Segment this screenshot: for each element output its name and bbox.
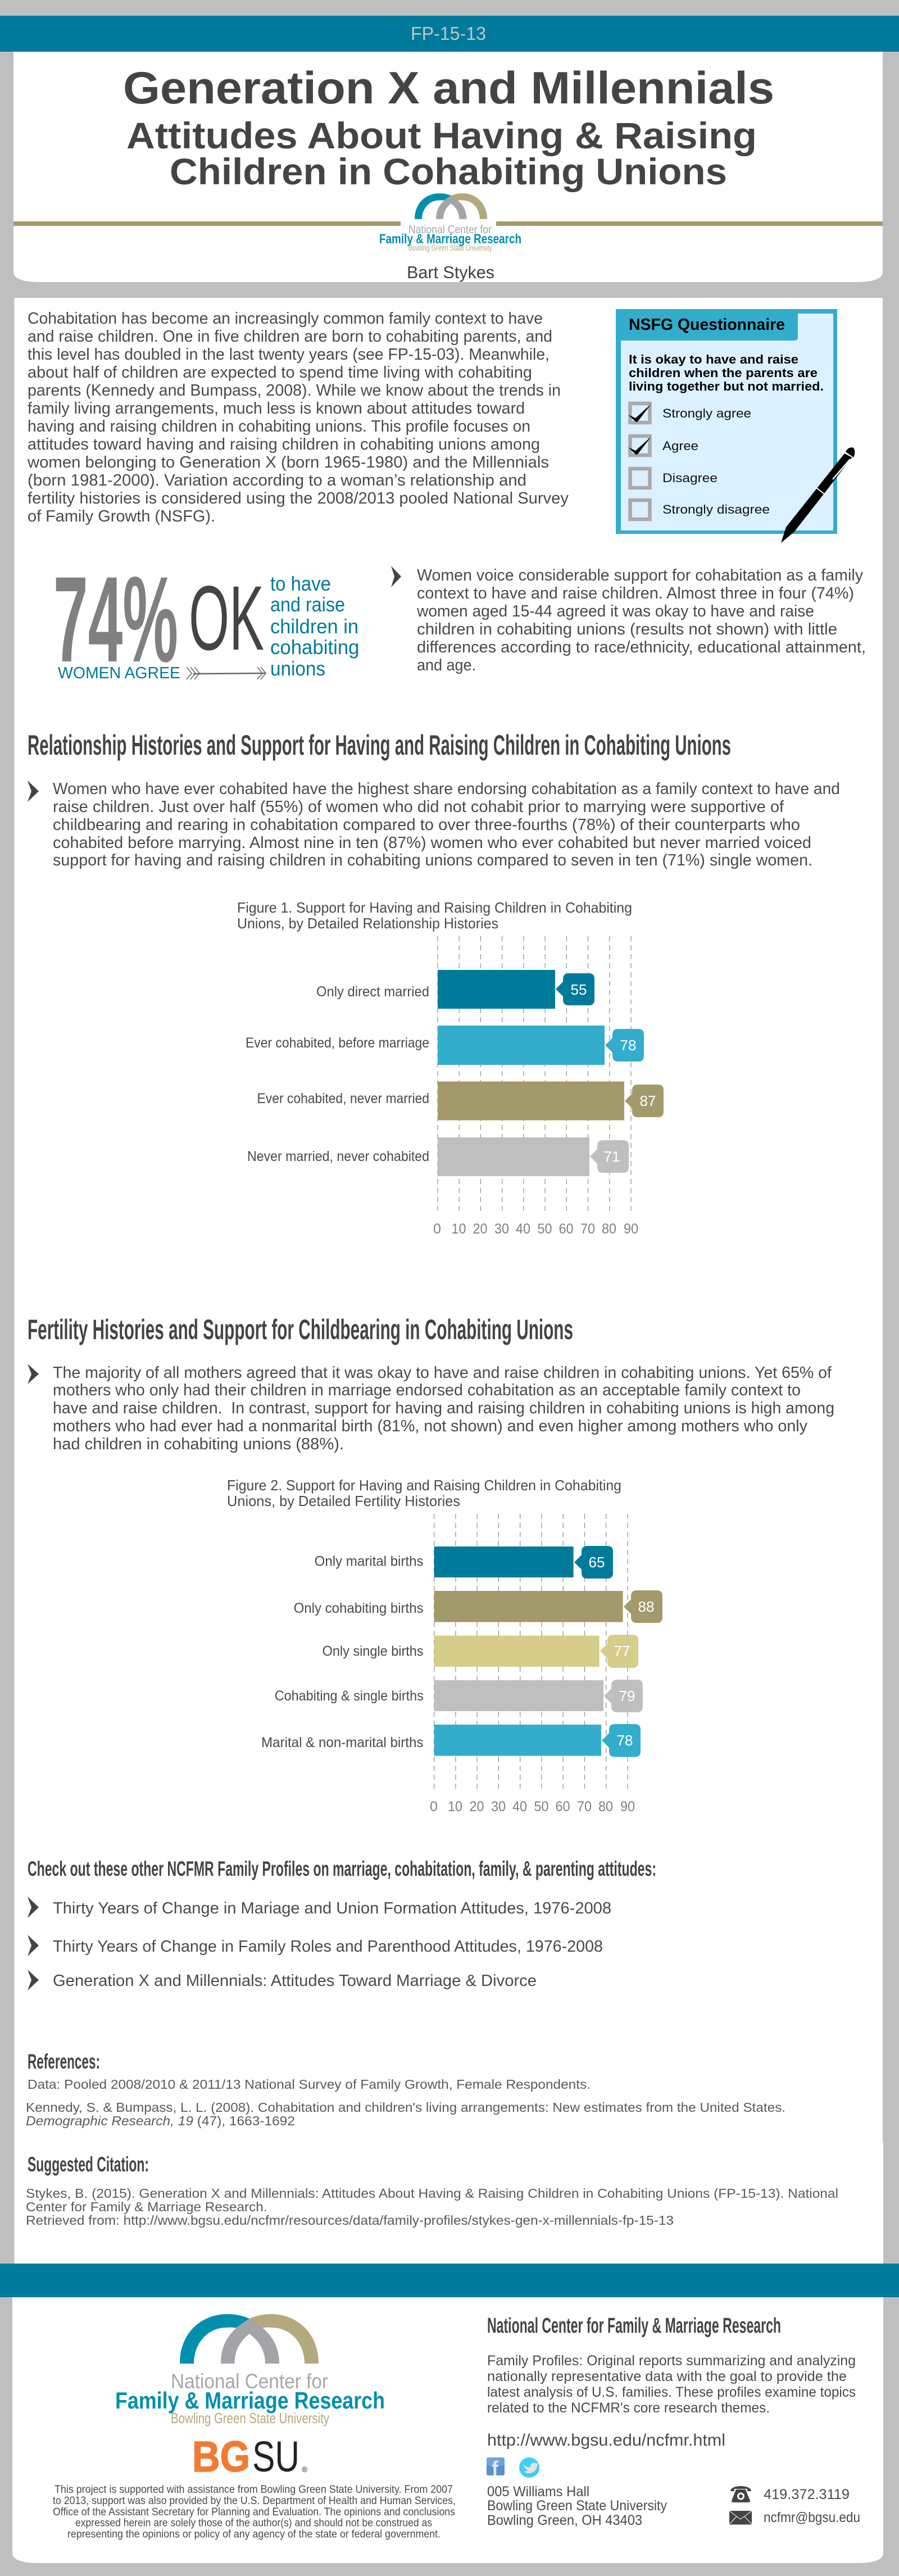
phone number: 419.372.3119	[764, 2487, 850, 2502]
paragraph: women voice support: women aged 15-44 agreed it was okay to have and raise	[416, 602, 814, 620]
figure 1 axis labels: 40	[516, 1221, 530, 1237]
title: Generation X and Millennials	[123, 63, 774, 114]
list: other family profiles: Thirty Years of Change in Mariage and Union Formation Attitudes, 1976-2008	[53, 1899, 611, 1917]
footer logo: BGSU	[192, 2433, 308, 2481]
bar: ever cohabited, never married 87	[257, 1081, 664, 1121]
bar: only marital births 65: 65	[589, 1554, 605, 1571]
bar: only direct married 55: Only direct married	[316, 984, 429, 1000]
funding statement: This project is supported with assistance from Bowling Green State University. From 2007	[55, 2484, 453, 2496]
intro paragraph: Cohabitation has become an increasingly common family context to have	[28, 310, 543, 328]
figure 1 axis labels: 70	[580, 1221, 595, 1237]
heading: suggested citation: Suggested Citation:	[28, 2153, 149, 2176]
bar: only single births 77: 77	[614, 1643, 630, 1659]
top band with profile number: FP-15-13	[411, 23, 486, 44]
figure 2 axis labels	[430, 1799, 635, 1815]
panel: NSFG questionnaire: NSFG Questionnaire	[629, 316, 785, 334]
paragraph: fertility histories: mothers who only had their children in marriage endorsed cohabitation as an acceptable family context to	[53, 1381, 801, 1399]
intro paragraph: (born 1981-2000). Variation according to a woman’s relationship and	[28, 471, 526, 489]
intro paragraph: and raise children. One in five children are born to cohabiting parents, and	[28, 328, 552, 346]
citation text: Center for Family & Marriage Research.	[26, 2199, 267, 2214]
bar: ever cohabited, never married 87: 87	[640, 1092, 656, 1109]
bar: only marital births 65	[315, 1546, 613, 1579]
bar: cohabiting and single births 79	[275, 1680, 643, 1712]
figure 2 title: Figure 2. Support for Having and Raising Children in Cohabiting	[227, 1477, 621, 1494]
list: other family profiles	[28, 1897, 611, 1990]
bar: only cohabiting births 88	[294, 1590, 662, 1623]
intro paragraph: parents (Kennedy and Bumpass, 2008). While we know about the trends in	[28, 382, 561, 400]
figure 1 title	[237, 899, 632, 932]
icon: pen	[781, 447, 855, 543]
figure 1 title: Figure 1. Support for Having and Raising Children in Cohabiting	[237, 899, 632, 916]
references text: Data: Pooled 2008/2010 & 2011/13 National Survey of Family Growth, Female Respondents.	[28, 2077, 591, 2092]
bar: only cohabiting births 88: 88	[638, 1598, 654, 1615]
title: Attitudes About Having & Raising	[126, 115, 757, 156]
figure 1 axis labels: 0	[433, 1221, 441, 1237]
bar: ever cohabited, before marriage 78: 78	[620, 1037, 636, 1054]
bar: marital and non-marital births 78: Marital & non-marital births	[261, 1735, 424, 1750]
bar: only direct married 55	[316, 970, 594, 1009]
paragraph: women voice support	[391, 566, 866, 674]
figure 2 axis labels: 20	[470, 1799, 484, 1815]
handwritten OK: OK	[189, 566, 264, 669]
icon: envelope	[729, 2511, 752, 2524]
figure 1 axis labels: 20	[473, 1221, 488, 1237]
figure 1 title: Unions, by Detailed Relationship Histories	[237, 915, 498, 932]
footer logo: BGSU: BG	[192, 2433, 250, 2481]
figure 1 axis labels	[433, 1221, 638, 1237]
paragraph: relationship histories: support for having and raising children in cohabiting unions compared to seven in ten (71%) single women.	[53, 851, 812, 869]
answer: disagree	[630, 469, 718, 488]
panel: NSFG questionnaire	[616, 309, 855, 543]
footer logo: BGSU: ®	[302, 2465, 308, 2474]
icon: facebook: f	[492, 2457, 499, 2480]
figure 2 axis labels: 30	[491, 1799, 506, 1815]
footer logo: NCFMR: Bowling Green State University	[171, 2410, 329, 2427]
address: Bowling Green, OH 43403	[487, 2512, 642, 2528]
references text: Kennedy, S. & Bumpass, L. L. (2008). Cohabitation and children's living arrangements: New estimates from the United States.	[26, 2100, 786, 2115]
bar: marital and non-marital births 78: 78	[617, 1732, 633, 1749]
figure 1 axis labels: 50	[537, 1221, 552, 1237]
paragraph: fertility histories: The majority of all mothers agreed that it was okay to have and raise children in cohabiting unions. Yet 65% of	[53, 1364, 832, 1382]
answer: disagree: Disagree	[662, 471, 718, 485]
icon: telephone	[730, 2486, 751, 2502]
teal caption: and raise	[270, 593, 345, 616]
list: other family profiles: Thirty Years of Change in Family Roles and Parenthood Attitudes, 1976-2008	[53, 1938, 603, 1956]
paragraph: fertility histories: mothers who had ever had a nonmarital birth (81%, not shown) and even higher among mothers who only	[53, 1417, 807, 1435]
bar: only single births 77: Only single births	[323, 1643, 424, 1659]
main panel	[15, 298, 883, 2264]
bar: marital and non-marital births 78	[261, 1724, 641, 1757]
footer band	[0, 2264, 899, 2297]
address: Bowling Green State University	[487, 2498, 667, 2514]
teal caption	[270, 572, 360, 680]
answer: agree	[628, 436, 698, 455]
figure 2 title	[227, 1477, 621, 1509]
figure 2 axis labels: 0	[430, 1799, 438, 1815]
figure 2 axis labels: 70	[577, 1799, 592, 1815]
intro paragraph	[27, 310, 569, 525]
bar: never married, never cohabited 71: 71	[604, 1148, 620, 1165]
address: 005 Williams Hall	[487, 2484, 589, 2500]
bar: only single births 77	[323, 1635, 638, 1668]
answer: agree: Agree	[662, 439, 698, 453]
website: http://www.bgsu.edu/ncfmr.html	[487, 2431, 725, 2450]
women agree label: WOMEN AGREE	[58, 664, 180, 682]
funding statement: Office of the Assistant Secretary for Planning and Evaluation. The opinions and conclusions	[53, 2506, 455, 2518]
intro paragraph: women belonging to Generation X (born 1965-1980) and the Millennials	[27, 453, 549, 471]
top band with profile number	[0, 16, 899, 52]
title	[123, 63, 774, 192]
paragraph: women voice support: children in cohabiting unions (results not shown) with little	[417, 620, 837, 638]
figure 2 axis labels: 90	[620, 1799, 635, 1815]
teal caption: to have	[270, 572, 331, 595]
footer logo: NCFMR	[115, 2314, 385, 2427]
citation text	[26, 2186, 838, 2228]
bar: cohabiting and single births 79: Cohabiting & single births	[275, 1688, 424, 1704]
footer panel	[12, 2297, 883, 2563]
intro paragraph: this level has doubled in the last twenty years (see FP-15-03). Meanwhile,	[28, 346, 550, 364]
header logo: Family & Marriage Research	[379, 232, 521, 247]
heading: references: References:	[28, 2050, 100, 2073]
figure 1 axis labels: 90	[624, 1221, 638, 1237]
teal caption: children in	[270, 615, 358, 638]
author: Bart Stykes	[407, 262, 494, 282]
figure 2 axis labels: 40	[512, 1799, 527, 1815]
intro paragraph: family living arrangements, much less is known about attitudes toward	[28, 400, 525, 418]
citation text: Retrieved from: http://www.bgsu.edu/ncfmr/resources/data/family-profiles/stykes-gen-x-millennials-fp-15-13	[26, 2213, 674, 2228]
paragraph: fertility histories	[28, 1364, 834, 1453]
header logo	[379, 193, 521, 253]
paragraph: women voice support: Women voice considerable support for cohabitation as a family	[417, 566, 863, 584]
funding statement: representing the opinions or policy of any agency of the state or federal government.	[67, 2529, 441, 2540]
funding statement: to 2013, support was also provided by the U.S. Department of Health and Human Services,	[53, 2495, 456, 2507]
figure 2 axis labels: 10	[448, 1799, 462, 1815]
arrow	[187, 667, 266, 679]
answer: strongly disagree: Strongly disagree	[662, 502, 770, 516]
footer description: latest analysis of U.S. families. These profiles examine topics	[487, 2384, 856, 2400]
references text: Demographic Research, 19 (47), 1663-1692	[26, 2114, 295, 2128]
intro paragraph: having and raising children in cohabiting unions. This profile focuses on	[28, 418, 530, 436]
paragraph: fertility histories: have and raise children. In contrast, support for having and raising children in cohabiting unions is high among	[53, 1399, 834, 1417]
figure 2 axis labels: 60	[555, 1799, 570, 1815]
footer logo: BGSU: SU	[252, 2433, 299, 2481]
intro paragraph: fertility histories is considered using the 2008/2013 pooled National Survey	[28, 489, 569, 507]
answer: strongly agree	[628, 403, 751, 423]
answer: strongly disagree	[630, 500, 770, 519]
icon: chevron bullet	[28, 1364, 39, 1384]
bar: never married, never cohabited 71	[247, 1137, 629, 1176]
bar: ever cohabited, before marriage 78: Ever cohabited, before marriage	[246, 1035, 429, 1051]
figure 2 axis labels: 80	[598, 1799, 613, 1815]
paragraph: women voice support: differences according to race/ethnicity, educational attainment,	[417, 638, 866, 656]
email: ncfmr@bgsu.edu	[764, 2510, 860, 2525]
footer description: Family Profiles: Original reports summarizing and analyzing	[487, 2353, 856, 2369]
bar: cohabiting and single births 79: 79	[619, 1688, 635, 1704]
intro paragraph: about half of children are expected to spend time living with cohabiting	[28, 364, 532, 382]
paragraph: relationship histories: raise children. Just over half (55%) of women who did not cohabit prior to marrying were supportive of	[53, 798, 784, 816]
header logo: National Center for	[408, 224, 492, 236]
header logo: Bowling Green State University	[408, 243, 492, 253]
chart: figure 1	[237, 899, 664, 1237]
icon: chevron bullet	[28, 781, 39, 802]
figure 1 axis labels: 80	[602, 1221, 616, 1237]
footer description: nationally representative data with the goal to provide the	[487, 2369, 847, 2384]
figure 1 axis labels: 30	[494, 1221, 509, 1237]
funding statement	[53, 2484, 456, 2540]
bar: never married, never cohabited 71: Never married, never cohabited	[247, 1149, 429, 1164]
icon: chevron bullet	[391, 566, 401, 587]
bar: only marital births 65: Only marital births	[315, 1553, 424, 1569]
question text	[629, 352, 824, 393]
figure 2 axis labels: 50	[534, 1799, 548, 1815]
intro paragraph: attitudes toward having and raising children in cohabiting unions among	[28, 436, 540, 453]
bar: only cohabiting births 88: Only cohabiting births	[294, 1600, 424, 1616]
paragraph: women voice support: context to have and raise children. Almost three in four (74%)	[417, 584, 854, 602]
citation text: Stykes, B. (2015). Generation X and Millennials: Attitudes About Having & Raising Children in Cohabiting Unions (FP-15-13). National	[26, 2186, 838, 2201]
paragraph: fertility histories: had children in cohabiting unions (88%).	[53, 1435, 344, 1453]
teal caption: unions	[270, 657, 325, 680]
paragraph: relationship histories: childbearing and rearing in cohabitation compared to over three-fourths (78%) of their counterparts who	[53, 816, 800, 834]
stat: 74% women agree	[53, 551, 360, 687]
question text: It is okay to have and raise	[629, 352, 798, 366]
chart: figure 2	[227, 1477, 662, 1815]
figure 1 axis labels: 60	[559, 1221, 573, 1237]
icon: facebook	[487, 2457, 505, 2480]
footer description	[487, 2353, 856, 2416]
footer logo: NCFMR: National Center for	[171, 2370, 328, 2393]
figure 2 title: Unions, by Detailed Fertility Histories	[227, 1493, 460, 1509]
paragraph: relationship histories	[28, 780, 840, 869]
bar: ever cohabited, before marriage 78	[246, 1026, 644, 1065]
teal caption: cohabiting	[270, 636, 360, 659]
answer: strongly agree: Strongly agree	[662, 406, 751, 420]
funding statement: expressed herein are solely those of the author(s) and should not be construed as	[75, 2518, 432, 2529]
footer description: related to the NCFMR's core research themes.	[487, 2400, 770, 2416]
title: Children in Cohabiting Unions	[170, 151, 727, 192]
icon: twitter	[519, 2457, 539, 2478]
paragraph: relationship histories: Women who have ever cohabited have the highest share endorsing cohabitation as a family context to have and	[53, 780, 840, 798]
list: other family profiles: Generation X and Millennials: Attitudes Toward Marriage & Divorce	[53, 1972, 537, 1990]
question text: living together but not married.	[629, 379, 824, 393]
paragraph: women voice support: and age.	[417, 656, 476, 674]
question text: children when the parents are	[629, 366, 818, 380]
paragraph: relationship histories: cohabited before marrying. Almost nine in ten (87%) women who ever cohabited but never married voiced	[53, 834, 811, 852]
address	[487, 2484, 667, 2528]
big number: 74%	[53, 551, 178, 687]
bar: only direct married 55: 55	[571, 981, 587, 998]
references text	[26, 2077, 786, 2128]
figure 1 axis labels: 10	[452, 1221, 466, 1237]
header panel	[0, 16, 899, 282]
footer logo: NCFMR: Family & Marriage Research	[115, 2387, 385, 2414]
bar: ever cohabited, never married 87: Ever cohabited, never married	[257, 1091, 429, 1106]
intro paragraph: of Family Growth (NSFG).	[28, 507, 215, 525]
